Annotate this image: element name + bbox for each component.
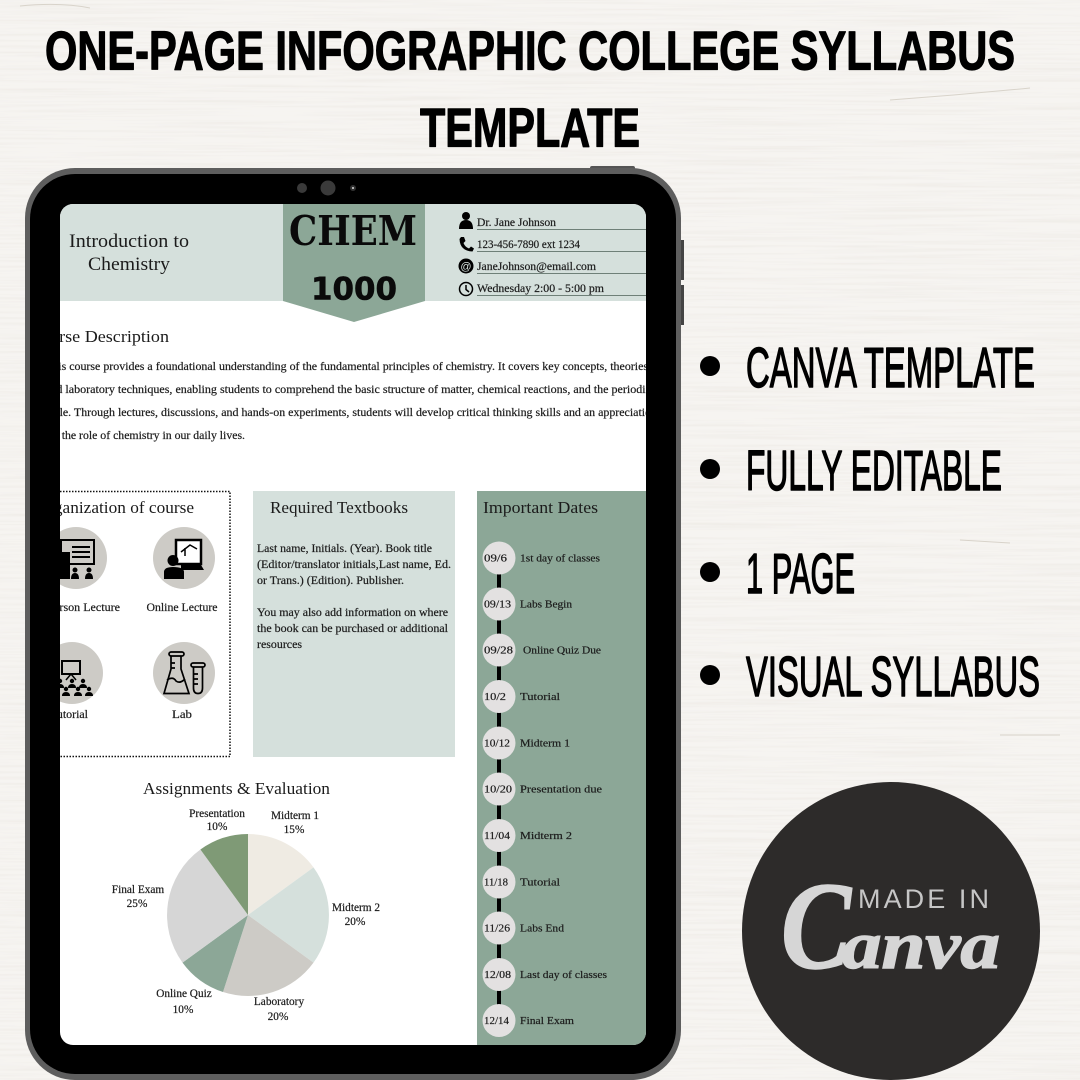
textbook citation text: or Trans.) (Edition). Publisher. <box>257 575 404 587</box>
timeline dates and events: 10/20 <box>484 784 513 796</box>
pie chart labels: Presentation <box>189 808 245 820</box>
timeline dates and events: 11/26 <box>484 922 511 934</box>
pie chart labels <box>112 808 380 1023</box>
tablet device frame <box>25 166 684 1080</box>
header band <box>60 204 646 301</box>
textbook citation text: resources <box>257 639 302 651</box>
label: online lecture: Online Lecture <box>146 602 218 614</box>
timeline dates and events: 09/6 <box>484 552 508 564</box>
contact text: JaneJohnson@email.com <box>477 261 596 273</box>
bullet: 1 page <box>700 542 855 606</box>
heading: required textbooks: Required Textbooks <box>270 498 408 517</box>
instructor contact details <box>458 212 646 296</box>
pie chart labels: Online Quiz <box>156 988 212 1000</box>
icon: person <box>459 212 473 229</box>
timeline dates and events <box>484 552 607 1027</box>
icon: clock <box>460 282 472 296</box>
pie chart labels: 25% <box>127 898 148 910</box>
pie chart labels: Laboratory <box>254 996 304 1008</box>
panel: important dates <box>477 491 646 1045</box>
pie chart labels: 10% <box>207 821 228 833</box>
timeline dates and events: 09/13 <box>484 598 512 610</box>
course description <box>29 327 657 442</box>
tablet screen: syllabus <box>29 204 657 1045</box>
timeline dates and events: 11/04 <box>484 830 511 842</box>
timeline dates and events: 10/2 <box>484 691 506 703</box>
timeline dates and events: Midterm 1 <box>520 738 570 750</box>
heading: important dates: Important Dates <box>483 498 598 517</box>
timeline dates and events: Tutorial <box>520 876 560 888</box>
course code banner: CHEM <box>289 207 417 255</box>
icon: at sign: @ <box>460 261 472 273</box>
icon: phone <box>460 237 474 252</box>
timeline dates and events: 1st day of classes <box>520 552 600 564</box>
heading: organization of course: Organization of course <box>36 498 194 517</box>
timeline dates and events: Last day of classes <box>520 969 607 981</box>
course title <box>69 231 189 275</box>
bullet: 1 page: 1 PAGE <box>746 542 855 606</box>
label: lab: Lab <box>172 709 192 721</box>
icon: tutorial <box>60 642 103 704</box>
contact text: Wednesday 2:00 - 5:00 pm <box>477 283 604 295</box>
timeline dates and events: 09/28 <box>484 644 514 656</box>
textbook citation text: the book can be purchased or additional <box>257 623 448 635</box>
timeline dates and events: Presentation due <box>520 784 602 796</box>
textbook citation text: (Editor/translator initials,Last name, Ed. <box>257 559 451 571</box>
pie chart: assessment weights <box>167 834 329 996</box>
timeline dates and events: Labs End <box>520 922 565 934</box>
bullet: fully editable <box>700 439 1002 503</box>
title: TEMPLATE <box>420 97 640 158</box>
timeline dates and events: Labs Begin <box>520 598 573 610</box>
pie chart labels: Final Exam <box>112 884 164 896</box>
course description: and laboratory techniques, enabling students to comprehend the basic structure of matter, chemical reactions, and the periodic <box>45 384 651 396</box>
course description: This course provides a foundational understanding of the fundamental principles of chemistry. It covers key concepts, theories, <box>45 361 651 373</box>
pie chart labels: Midterm 2 <box>332 902 380 914</box>
pie chart labels: 20% <box>268 1011 289 1023</box>
course code banner: 1000 <box>311 272 397 308</box>
course title: Chemistry <box>88 254 171 275</box>
timeline dates and events: 12/08 <box>484 969 512 981</box>
textbook citation text: Last name, Initials. (Year). Book title <box>257 543 432 555</box>
course description: table. Through lectures, discussions, and hands-on experiments, students will develop critical thinking skills and an appreciation <box>45 407 657 419</box>
icon: online lecture <box>153 527 215 589</box>
pie chart labels: 10% <box>173 1004 194 1016</box>
course code banner <box>283 204 425 322</box>
timeline dates and events: 11/18 <box>484 876 508 888</box>
timeline dates and events: 12/14 <box>484 1015 509 1027</box>
timeline connector <box>497 558 501 1028</box>
panel: required textbooks <box>253 491 455 757</box>
heading: assignments and evaluation: Assignments & Evaluation <box>143 779 330 798</box>
badge: made in canva: anva <box>842 907 1000 983</box>
panel: organization of course <box>60 490 231 758</box>
textbook citation text: You may also add information on where <box>257 607 448 619</box>
contact text: Dr. Jane Johnson <box>477 217 556 229</box>
icon: lab flask and test tube <box>153 642 215 704</box>
timeline dates and events: Midterm 2 <box>520 830 572 842</box>
label: tutorial: Tutorial <box>50 709 88 721</box>
badge: made in canva: MADE IN <box>858 884 989 914</box>
contact text <box>477 217 604 295</box>
feature list <box>700 336 1040 709</box>
course title: Introduction to <box>69 231 189 252</box>
textbook citation text <box>257 543 451 651</box>
pie chart labels: 20% <box>345 916 366 928</box>
icon: in-person lecture <box>60 527 107 589</box>
badge: made in canva: C <box>781 858 852 996</box>
icon: at sign <box>458 258 474 274</box>
label: in-person lecture: In-person Lecture <box>34 602 120 614</box>
pie chart labels: 15% <box>284 824 305 836</box>
timeline dates and events: 10/12 <box>484 738 510 750</box>
contact text: 123-456-7890 ext 1234 <box>477 239 580 251</box>
course description: for the role of chemistry in our daily lives. <box>45 430 245 442</box>
timeline date circles <box>482 542 516 1037</box>
pie chart labels: Midterm 1 <box>271 810 319 822</box>
timeline dates and events: Online Quiz Due <box>523 644 601 656</box>
badge: made in canva <box>742 782 1040 1080</box>
title <box>45 20 1015 158</box>
timeline dates and events: Final Exam <box>520 1015 574 1027</box>
course description: Course Description <box>29 327 170 346</box>
timeline dates and events: Tutorial <box>520 691 560 703</box>
